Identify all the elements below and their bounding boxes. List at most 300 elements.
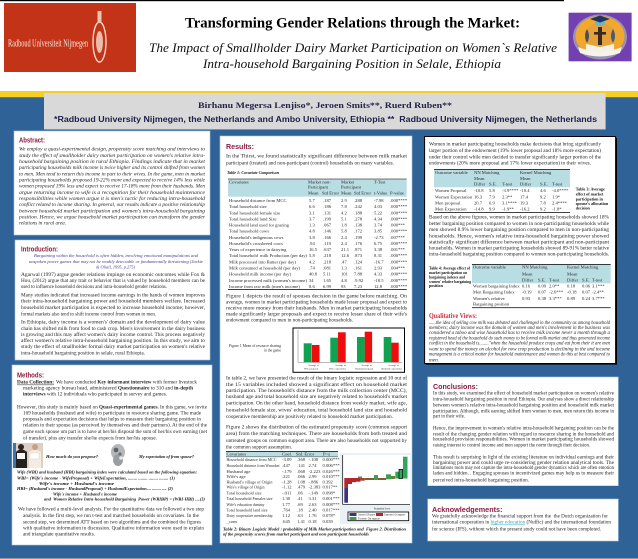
- table 1: covariate comparison: 6.75: [374, 241, 383, 246]
- table 2: binary logistic model: -2.383: [308, 485, 321, 490]
- table 1: covariate comparison: .161: [354, 266, 363, 270]
- bargaining equations: [16, 470, 206, 502]
- experimental games text: However, this study is mainly based on Quasi-experimental games. In this game, we invite: [17, 405, 208, 410]
- table 3: spouse allocation: T-test: [502, 181, 513, 186]
- abstract text: responsibilities while women argue it is men's tactic for reducing intra-household: [19, 197, 206, 202]
- abstract text: argue returning income to wife is a recognition for their household maintenance: [19, 191, 206, 196]
- table 3: spouse allocation: -16.2: [520, 207, 530, 212]
- table 1: covariate comparison: 3.74: [374, 223, 383, 228]
- table 2: binary logistic model: -3.09: [282, 457, 292, 462]
- introduction text: affect women's relative intra-household bargaining position. In this study, we aim to: [21, 339, 206, 344]
- qualitative views text: want to spend the money on alcohol for now crop production is declining in the and income: [429, 347, 611, 352]
- table 1: covariate comparison: 3.7: [309, 216, 315, 221]
- table 2 and figure 2 caption: [223, 527, 407, 537]
- table 1: covariate comparison: .199: [323, 216, 332, 221]
- results intro text: In the Thirst, we found statistically significant difference between milk market: [226, 154, 408, 159]
- table 2: binary logistic model: 0.017***: [322, 507, 340, 512]
- table 1: covariate comparison: 4.33: [374, 272, 383, 277]
- table 1: covariate comparison: -16.7: [374, 259, 384, 264]
- table 1: covariate comparison: .067: [323, 223, 332, 228]
- photo: couple: [13, 443, 43, 468]
- experimental games text: of transfer), plus any transfer she/he expects from her/his spouse.: [23, 436, 157, 441]
- introduction text: intra-household bargaining position in selale, rural Ethiopia.: [21, 352, 145, 357]
- analysis text: second step, we determined ATT based on two algorithms and the combined the figures: [23, 520, 201, 525]
- table 2: binary logistic model: 0.017**: [322, 485, 338, 490]
- table 2: binary logistic model: Household distance from MCC: [226, 457, 276, 462]
- table 3: spouse allocation: -1.9**: [502, 207, 515, 212]
- table 1: covariate comparison: 40.8: [309, 272, 318, 277]
- table 1: covariate comparison: 5.22: [374, 210, 383, 215]
- data collection text: [17, 381, 198, 397]
- table 2: binary logistic model: 0.078*: [322, 513, 336, 518]
- heading: conclusions: Conclusions:: [433, 384, 478, 391]
- introduction text: household market participation is expected to increase household income; however,: [21, 306, 205, 311]
- table 2: binary logistic model: 0.000***: [322, 457, 340, 462]
- table 2: binary logistic model: Covariates: [226, 452, 246, 457]
- conclusions text: between women's relative intra-household bargaining position and household milk market: [433, 403, 615, 408]
- table 3: spouse allocation: Mean: [520, 176, 531, 181]
- table 1: covariate comparison: Participant: [341, 185, 362, 190]
- data collection text: marketing agency bureau head, administered Questionnaire to 310 and in-depth: [23, 386, 193, 391]
- table 2 and figure 2 caption: Table 2: Binary Logistic Model : probability of Milk Market participation and Figure 2. Distribution: [223, 527, 407, 532]
- results intro text: [226, 154, 408, 167]
- table 1: covariate comparison: Market: [341, 179, 355, 184]
- chart: figure 2 propensity score distribution: Untreated: Off support: [358, 514, 375, 516]
- table 1: covariate comparison: .000****: [390, 278, 408, 283]
- figure 1 caption: Figure 1 Mean of resource sharing: [229, 343, 282, 348]
- experimental games text: 169 households (husband and wife) to participate in resource sharing game. The made: [23, 411, 202, 416]
- table 1: covariate comparison: Household distance from MCC: [229, 198, 287, 203]
- introduction text: In Ethiopia, dairy income is a women's' domain and the development of dairy value: [21, 321, 206, 326]
- experimental games text: game each spouse um part is to have at her/his disposal the sum of her/his own earning (net: [23, 430, 208, 435]
- table 2: binary logistic model: 3.31: [308, 496, 317, 501]
- table 2: binary logistic model: 2.40: [308, 507, 317, 512]
- table 1: covariate comparison: -7.98: [374, 198, 384, 203]
- table 1: covariate comparison: 4.34: [374, 216, 383, 221]
- table 4: bargaining indexes: 3.3***: [549, 296, 562, 301]
- table 1: covariate comparison: 12.8: [374, 284, 383, 289]
- table 1: covariate comparison: 34: [309, 278, 314, 283]
- photo: thinking figure: [111, 444, 125, 466]
- table 1: covariate comparison: Household's indigenous cows: [229, 235, 284, 240]
- qualitative views text: members; dairy income was the domain of women and men's involvement in the business was: [429, 326, 610, 331]
- abstract text: to men. Men tend to return this income in part to their wives. In the game, men in market: [19, 172, 206, 177]
- introduction text: Hou, (2012) argue that any trait or behavior that is valued by household members can be: [21, 279, 206, 284]
- table 2: binary logistic model: 2.99: [308, 474, 317, 479]
- decisions text: [429, 143, 602, 167]
- table 4: bargaining indexes: Mean: [522, 272, 533, 277]
- acknowledgements text: [432, 514, 612, 533]
- table 1: covariate comparison: 5.8: [309, 253, 315, 258]
- table 3: spouse allocation: 9.2: [540, 207, 546, 212]
- conclusions text: perceived intra-household bargaining position.: [433, 478, 529, 483]
- conclusions text: bargaining power and could urge re-considering gender relation analytical tools. The: [433, 461, 615, 466]
- table 1: covariate comparison: .138: [354, 223, 363, 228]
- experimental games text: proposals and expectation decisions that helps to measure their bargaining position in: [23, 417, 202, 422]
- regression text: household female size, wives' education, total household land size and household: [226, 409, 408, 414]
- acknowledgements text: for science (IFS), without which the present study could not have been completed.: [432, 528, 601, 533]
- table 1: covariate comparison: .47: [341, 259, 347, 264]
- table 2: binary logistic model: 1.76: [308, 513, 317, 518]
- table 1: covariate comparison: 4.8: [341, 278, 347, 283]
- table 1: covariate comparison: .199: [354, 235, 363, 240]
- conclusions text: In this study, we examined the effect of household market participation on women's relative: [433, 392, 615, 397]
- table 1: covariate comparison: .288: [354, 198, 363, 203]
- table 1: covariate comparison: Covariates: [229, 179, 249, 184]
- heading: results: Results:: [226, 144, 254, 151]
- table 1: covariate comparison: 5.8: [341, 229, 347, 234]
- introduction text: is growing and this may affect women's dairy income control. This process negatively: [21, 333, 206, 338]
- table 4: bargaining indexes: -0.18: [567, 290, 577, 295]
- table 1: covariate comparison: .000****: [390, 216, 408, 221]
- table 2: binary logistic model: .18: [297, 507, 303, 512]
- table 1: covariate comparison: 2.4: [341, 241, 347, 246]
- chart: figure 2 propensity score distribution: Propensity Score: [374, 508, 391, 510]
- table 3: spouse allocation: -4.0****: [552, 188, 569, 193]
- table 1: covariate comparison: 4.2: [341, 210, 347, 215]
- table 2: binary logistic model: .764: [282, 507, 291, 512]
- table 3: spouse allocation: -10.8: [474, 188, 484, 193]
- table 2: binary logistic model: Wife's village of Origin: [226, 485, 265, 490]
- table 3: spouse allocation: Men Expectation: [435, 207, 467, 212]
- table 1: covariate comparison: 101: [341, 272, 349, 277]
- figure 2 text: area) from the matching techniques. There are households from both treated and: [226, 432, 408, 437]
- table 1: covariate comparison: 2.9: [341, 198, 347, 203]
- table 4: bargaining indexes: 0.93: [522, 296, 531, 301]
- introduction text: used to influence household decisions and intra-household gender relations.: [21, 285, 167, 290]
- conclusions text: household provision responsibilities. Women in market participating households showed: [433, 438, 615, 443]
- table 1: covariate comparison: Years of experience in dairying: [229, 247, 287, 252]
- bargaining position text: intra-household bargaining position compared to women non-participating households.: [429, 253, 609, 258]
- table 3: spouse allocation: 9.9: [489, 207, 495, 212]
- chart: figure 1 resource sharing bars: Average of: [308, 364, 319, 367]
- table 3: spouse allocation: 3.1****: [502, 201, 518, 206]
- conclusions text: Hence, the improvement in women's relative intra-household bargaining position can be the: [433, 427, 615, 432]
- table 4 caption: position: [429, 283, 444, 288]
- abstract text: [18, 148, 206, 227]
- table 1: covariate comparison: .873: [354, 253, 363, 258]
- chart: figure 2 propensity score distribution: Untreated: On support: [384, 514, 405, 516]
- table 4: bargaining indexes: 0.07: [538, 290, 547, 295]
- table 4: bargaining indexes: T-test: [592, 278, 603, 283]
- table 3: spouse allocation: Women Expectation: [435, 195, 473, 200]
- table 2: binary logistic model: Household distance from Wmarket: [226, 463, 280, 468]
- table 3: spouse allocation: 2.4****: [552, 201, 568, 206]
- table 1: covariate comparison: .871: [354, 247, 363, 252]
- abstract text: participating households proposed 19-22% more and expected to receive 14% less while: [18, 178, 206, 184]
- table 4: bargaining indexes: 2.0**: [549, 283, 560, 288]
- table 2: binary logistic model: .368: [297, 457, 306, 462]
- table 2: binary logistic model: 2.74: [308, 463, 317, 468]
- table 3 caption: decision: [576, 205, 591, 210]
- table 1: covariate comparison: .000****: [390, 272, 408, 277]
- regression text: participation. The household's distance from the milk collection center (MCC),: [226, 389, 407, 394]
- table 4: bargaining indexes: S.E.: [538, 278, 546, 283]
- table 1: covariate comparison: 4.8: [309, 229, 315, 234]
- subtitle: [149, 41, 557, 71]
- question: proposal: How much do you propose?: [45, 454, 98, 459]
- table 1: covariate comparison: .081: [323, 266, 332, 270]
- table 1: covariate comparison: 8.6: [309, 284, 315, 289]
- table 1: covariate comparison: Household land used for grazing: [229, 223, 290, 228]
- table 4: bargaining indexes: -2.4**: [592, 290, 605, 295]
- abstract text: participating households milk income is twice higher and its control shifted from women: [18, 166, 206, 171]
- table 4: bargaining indexes: -2.6***: [549, 290, 564, 295]
- table 1: covariate comparison: .166: [323, 235, 332, 240]
- table 1: covariate comparison: 1.3: [341, 266, 347, 270]
- table 4: bargaining indexes: [472, 264, 611, 308]
- table 1: covariate comparison: 7.88: [354, 272, 363, 277]
- abstract text: household bargaining position in rural Ethiopia. Findings indicate that in market: [19, 160, 206, 165]
- logo: Radboud University Nijmegen: Radboud Universiteit Nijmegen: [8, 38, 88, 50]
- table 3: spouse allocation: Differ: [520, 181, 532, 186]
- heading: qualitative views: Qualitative Views:: [429, 312, 477, 320]
- table 1: covariate comparison: Total household cows: [229, 229, 269, 234]
- data collection text: Data Collection:: [17, 381, 54, 386]
- bargaining equations: HBI= (Husband's income - HusbandProposal) + HusbandExpectation.... ........ .... (2): [16, 486, 174, 491]
- table 1: covariate comparison: 5.7: [309, 198, 315, 203]
- table 1: covariate comparison: .218: [323, 259, 332, 264]
- quote: [29, 253, 203, 270]
- table 4: bargaining indexes: 0.09: [538, 283, 547, 288]
- table 1: covariate comparison: .94: [309, 241, 315, 246]
- table 3 caption: spouse's allocation: [576, 201, 609, 206]
- conclusions text: participation. Although, milk earning shifted from women to men, men return this income in: [433, 410, 614, 415]
- table 1: covariate comparison: .176: [354, 241, 363, 246]
- table 2: binary logistic model: -.149: [308, 491, 319, 496]
- table 4 caption: women' relative bargaining: [429, 279, 471, 284]
- table 1: covariate comparison: 7.8: [341, 204, 347, 209]
- table 1: covariate comparison: .188: [354, 210, 363, 215]
- table 4: bargaining indexes: 0.89: [567, 296, 576, 301]
- chart: figure 1 resource sharing bars: Husband proposal: [355, 368, 373, 370]
- table 4: bargaining indexes: 0.18: [567, 283, 576, 288]
- table 1: covariate comparison: -18.5: [374, 278, 384, 283]
- table 1: covariate comparison: 6.6: [309, 204, 315, 209]
- table 1: covariate comparison: .637: [323, 247, 332, 252]
- conclusions text: intra-household bargaining position in rural Ethiopia. Our analyses show a direct relationship: [433, 397, 614, 402]
- table 1: covariate comparison: Participant: [308, 185, 329, 190]
- table 4: bargaining indexes: -0.19: [522, 290, 532, 295]
- figure 2 text: [226, 426, 408, 451]
- decisions text: endowments (20% more proposal and 17% lower expectation) to their wives.: [429, 162, 591, 167]
- table 2: binary logistic model: .645: [282, 519, 291, 524]
- table 1: covariate comparison: .74: [309, 266, 315, 270]
- table 2: binary logistic model: Coef.: [282, 452, 292, 457]
- panel: authors: Birhanu Megersa Lenjiso*, Jeroen Smits**, Ruerd Ruben**: [198, 101, 452, 110]
- title: Transforming Gender Relations through the Market:: [185, 16, 520, 32]
- analysis text: and triangulate quantitative results.: [23, 533, 95, 538]
- table 3: spouse allocation: 17.4: [520, 195, 529, 200]
- table 4 caption: bargaining indexes and: [429, 275, 466, 280]
- qualitative views text: management is a critical matter for household maintenance and women do this at best compared to: [429, 353, 610, 358]
- table 1: covariate comparison: Std Error: [322, 191, 339, 196]
- regression text: participation. On the other hand, household distance from weekly market, wife age,: [226, 401, 407, 406]
- table 1: covariate comparison: Household milk income (per day): [229, 272, 291, 277]
- table 2: binary logistic model: -.108: [308, 457, 319, 462]
- analysis text: We have followed a multi-level analysis. For the quantitative data we followed a two step: [18, 507, 205, 512]
- panel: abstract: [14, 131, 210, 235]
- table 1: covariate comparison: 3.38: [374, 247, 383, 252]
- figure 2 text: Figure 2 shows the distribution of the estimated propensity score (common support: [226, 426, 408, 431]
- data collection text: We have conducted Key informant interview with former livestock: [56, 381, 198, 386]
- chart: figure 1 resource sharing bars: Wife expectation: [329, 368, 347, 370]
- table 1: covariate comparison: [228, 179, 408, 290]
- table 1: covariate comparison: .146: [323, 229, 332, 234]
- table 1: covariate comparison: .000****: [390, 229, 408, 234]
- chart: figure 2 propensity score distribution: [340, 453, 411, 524]
- table 4: bargaining indexes: 0.06: [582, 283, 591, 288]
- panel: methods: [12, 365, 212, 545]
- table 2: binary logistic model: 0.006***: [322, 463, 340, 468]
- table 4: bargaining indexes: Outcome variable: [473, 265, 506, 270]
- quote: & Oliall, 1995, p.275): [96, 264, 136, 270]
- table 1: covariate comparison: .119: [323, 241, 332, 246]
- table 1: covariate comparison: .9.92: [354, 278, 364, 283]
- decisions text: under their control while men decided to transfer significantly larger portion of the: [429, 156, 602, 161]
- chart: figure 2 propensity score distribution: Treated: On support: [358, 518, 380, 520]
- table 3: spouse allocation: 7.8: [540, 201, 546, 206]
- table 2: binary logistic model: 0.098*: [322, 491, 336, 496]
- table 1: covariate comparison: .000****: [390, 253, 408, 258]
- table 3: spouse allocation: Outcome variable: [435, 170, 468, 175]
- table 1: covariate comparison: .000****: [390, 210, 408, 215]
- table 1: covariate comparison: .187: [323, 198, 332, 203]
- table 4: bargaining indexes: Bargaining position: [473, 302, 510, 307]
- table 2: binary logistic model: -1.28: [282, 480, 292, 485]
- table 1 caption: Table 1: Covariate Comparison: [227, 170, 280, 175]
- table 2: binary logistic model: Husband's village of Origin: [226, 480, 273, 485]
- table 3: spouse allocation: 5.8: [489, 188, 495, 193]
- figure 1 caption: in the game: [264, 348, 281, 353]
- figure 1 text: Figure 1 depicts the result of spouses decision in the game before matching. On: [226, 295, 408, 300]
- table 1: covariate comparison: .131: [323, 210, 332, 215]
- table 3: spouse allocation: 20.7: [474, 201, 483, 206]
- table 1: covariate comparison: Income processed milk (women's income): [229, 278, 307, 283]
- table 2: binary logistic model: 0.001***: [322, 496, 340, 501]
- bargaining position text: statistically significant difference between market participant and non-participant: [429, 241, 610, 246]
- chart: figure 1 resource sharing bars: Average of: [335, 364, 346, 367]
- table 1: covariate comparison: 93: [341, 284, 346, 289]
- table 3: spouse allocation: Kernel Matching: [520, 170, 552, 175]
- table 1: covariate comparison: .000****: [390, 241, 408, 246]
- table 3: spouse allocation: S.E.: [540, 181, 548, 186]
- figure 1 text: made significantly larger proposals and expect to receive lesser share of their wife's: [226, 313, 407, 318]
- introduction text: Many studies indicated that increased income earnings in the hands of women improves: [21, 293, 205, 298]
- table 4 caption: [429, 266, 471, 288]
- introduction text: chain has shifted milk from food to cash crop. Men's involvement in the dairy business: [21, 327, 205, 332]
- table 4 caption: Table 4: Average effect of: [429, 266, 471, 271]
- conclusions text: part to their wife.: [433, 414, 465, 419]
- qualitative views text: men.: [429, 358, 439, 363]
- table 2: binary logistic model: .221: [282, 474, 291, 479]
- table 4: bargaining indexes: 3.7***: [592, 296, 605, 301]
- table 2: binary logistic model: .06: [297, 491, 303, 496]
- table 1: covariate comparison: Mean: [308, 191, 319, 196]
- table 3: spouse allocation: -10.4: [520, 188, 530, 193]
- abstract text: We employ a quasi-experimental design, propensity score matching and interviews to: [19, 148, 206, 153]
- table 2: binary logistic model: 1.41: [297, 519, 306, 524]
- experimental games text: relation to their spouse (as perceived by themselves and their partners). At the end of the: [23, 423, 208, 428]
- table 4: bargaining indexes: 0.07: [582, 290, 591, 295]
- table 1: covariate comparison: .001***: [390, 247, 406, 252]
- table 2: binary logistic model: Total household land size: [226, 507, 268, 512]
- regression text: the 15 variables included showed a significant effect on household market: [226, 383, 408, 388]
- table 1: covariate comparison: 3.1: [309, 210, 315, 215]
- figure 1 text: [226, 295, 408, 324]
- heading: introduction: Introduction:: [21, 246, 58, 254]
- regression text: In table 2, we have presented the result of the binary logistic regression and 10 out of: [226, 377, 407, 382]
- figure 1 caption: [229, 343, 282, 353]
- table 1: covariate comparison: .278: [354, 216, 363, 221]
- table 2: binary logistic model: .068: [297, 469, 306, 474]
- table 2: binary logistic model: .69: [297, 502, 303, 507]
- table 2: binary logistic model: 0.392: [322, 480, 334, 485]
- table 2: binary logistic model: 0.026***: [322, 469, 340, 474]
- experimental games text: [17, 405, 208, 441]
- table 3: spouse allocation: -1.8*: [552, 207, 562, 212]
- table 1: covariate comparison: Total household female size: [229, 210, 280, 215]
- table 1: covariate comparison: 4.2: [309, 259, 315, 264]
- table 2: binary logistic model: 0.008***: [322, 502, 340, 507]
- abstract text: conflict related to income sharing. In general, our results indicate a positive relationship: [19, 203, 206, 208]
- table 1: covariate comparison: 12.6: [341, 253, 350, 258]
- table 4: bargaining indexes: NN Matching: [522, 265, 548, 270]
- table 1: covariate comparison: Market non-: [308, 179, 331, 184]
- table 3 caption: [576, 187, 609, 210]
- chart: figure 1 resource sharing bars: Average of: [388, 364, 399, 367]
- table 3: spouse allocation: -14.8: [474, 207, 484, 212]
- table 1: covariate comparison: T-Test: [374, 179, 386, 184]
- table 2 and figure 2 caption: of the propensity scores from market participant and non-participant households: [223, 532, 369, 537]
- table 3: spouse allocation: Differ: [474, 181, 486, 186]
- table 2: binary logistic model: 0.18: [308, 519, 317, 524]
- heading: acknowledgements: Acknowledgements:: [432, 507, 502, 514]
- chart: figure 1 resource sharing bars: [293, 328, 404, 372]
- table 4: bargaining indexes: Kernel Matching: [567, 265, 599, 270]
- table 1: covariate comparison: 4.03: [374, 204, 383, 209]
- table 3: spouse allocation: 9.2: [540, 195, 546, 200]
- table 2: binary logistic model: 2.63: [308, 502, 317, 507]
- table 2: binary logistic model: .41: [297, 496, 303, 501]
- table 1: covariate comparison: 3.8: [309, 235, 315, 240]
- acknowledgements text: international cooperation in higher education (Nuffic) and the international foundation: [432, 521, 612, 526]
- table 1: covariate comparison: 21.1: [341, 247, 350, 252]
- abstract text: women proposed 19% less and expect to receive 17-18% more from their husbands. Men: [19, 185, 206, 190]
- qualitative views text: registered head of the household do such money to be formal milk market and thus generated income: [429, 337, 611, 342]
- table 1: covariate comparison: 2.4: [341, 235, 347, 240]
- chart: figure 1 resource sharing bars: Average of: [361, 364, 372, 367]
- quote: unspoken power games that may not be readily detectable or fundamentally threatening (Jackie: [29, 259, 203, 264]
- panel: conclusions: [428, 377, 618, 486]
- bargaining position text: [429, 216, 610, 258]
- table 3: spouse allocation: 4.6: [540, 188, 546, 193]
- table 3: spouse allocation: Mean: [474, 176, 485, 181]
- table 2: binary logistic model: Wife's education dummy: [226, 502, 265, 507]
- table 1: covariate comparison: .124: [354, 259, 363, 264]
- table 1: covariate comparison: Std Error: [354, 191, 371, 196]
- table 4 caption: market participation on: [429, 270, 468, 275]
- table 1: covariate comparison: .218: [323, 253, 332, 258]
- table 4: bargaining indexes: 3.1***: [592, 283, 605, 288]
- table 3: spouse allocation: 19.3: [520, 201, 529, 206]
- table 1: covariate comparison: 16.5: [309, 247, 318, 252]
- qualitative views text: ......the idea of selling cow milk was debated and challenged in the community as among household: [429, 321, 610, 326]
- table 3 caption: participation in: [576, 197, 604, 202]
- table 2: binary logistic model: 0.039: [322, 519, 334, 524]
- conclusions text: raising interest to control income and men support the norm through their decision.: [433, 443, 590, 448]
- introduction text: formal markets also tend to shift income control from women to men.: [21, 312, 156, 318]
